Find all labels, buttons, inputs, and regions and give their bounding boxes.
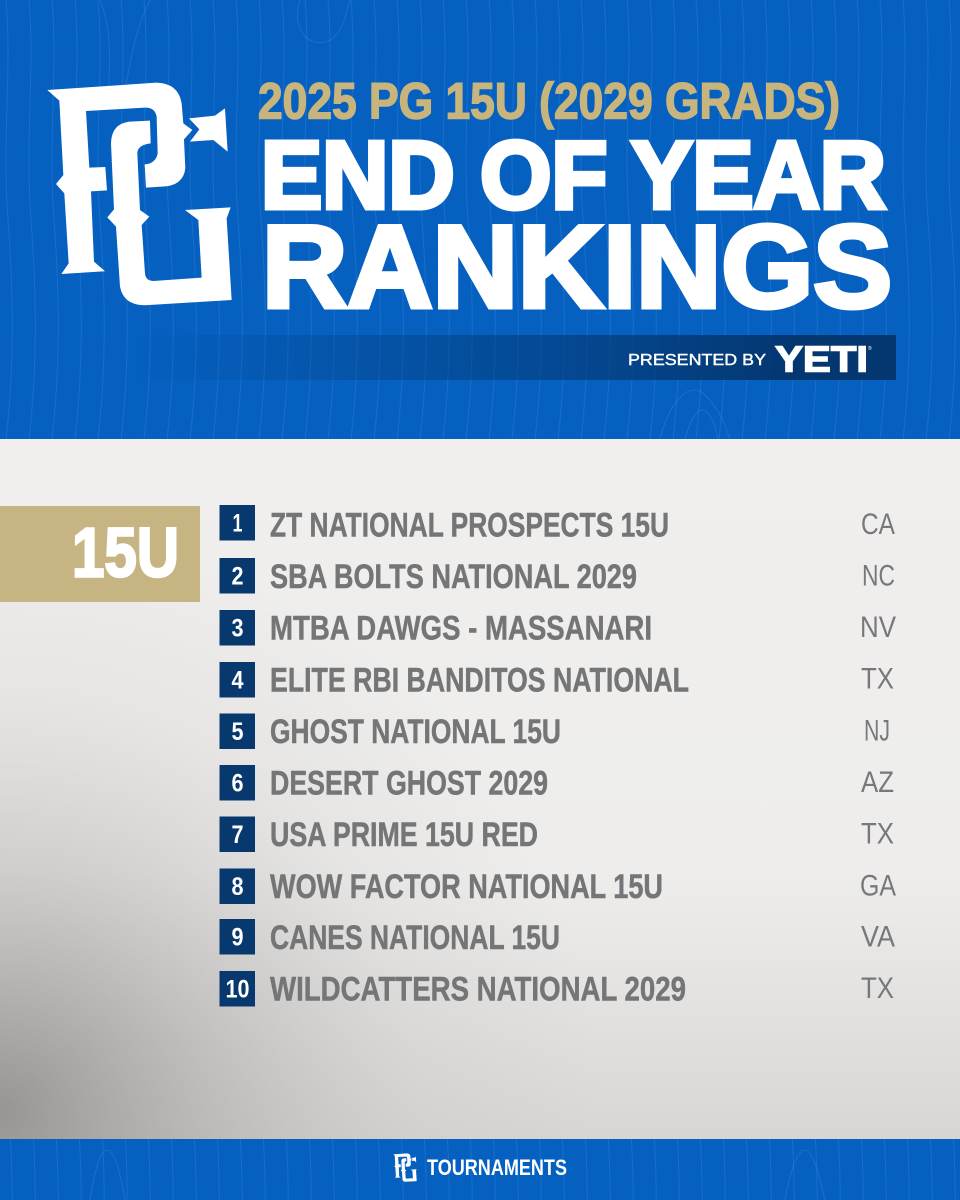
rank 1: ZT NATIONAL PROSPECTS 15U [270,506,669,544]
title: end of year: END OF YEAR [261,122,886,229]
rank 6: DESERT GHOST 2029 [270,764,548,802]
rank 3: MTBA DAWGS - MASSANARI [270,609,652,647]
rank 6: 6 [232,769,244,797]
rank 8: WOW FACTOR NATIONAL 15U [270,868,663,906]
rank 9: 9 [232,923,244,951]
footer bar [0,1139,960,1200]
rank 1: 1 [232,509,243,537]
header background [0,0,960,439]
rank 9 [220,919,895,957]
title: rankings: RANKINGS [262,201,892,332]
rank 10: TX [861,972,894,1005]
PG logo [47,83,232,305]
rank 3: NV [860,611,896,644]
rank 7: USA PRIME 15U RED [270,816,538,854]
rank 2: SBA BOLTS NATIONAL 2029 [270,558,637,596]
sponsor banner [130,335,896,380]
age group tab [0,506,200,602]
rankings panel background [0,439,960,1139]
rank 2: 2 [232,562,244,590]
sponsor banner: PRESENTED BY [628,352,766,369]
rank 5: 5 [232,718,244,746]
rank 10: WILDCATTERS NATIONAL 2029 [270,970,686,1008]
rank 6: AZ [861,766,894,799]
rank 2: NC [862,559,895,592]
title: season line: 2025 PG 15U (2029 GRADS) [258,72,840,130]
rankings list [220,505,896,1008]
rank 4: 4 [232,666,244,694]
rank 1: CA [861,508,895,541]
rank 6 [220,764,894,802]
rank 8: 8 [232,873,244,901]
rank 4: TX [861,662,894,695]
rank 7: 7 [232,821,244,849]
footer PG logo [393,1153,417,1182]
rank 7: TX [861,817,894,850]
rank 9: VA [861,920,895,953]
age group tab: 15U [72,514,179,592]
rank 5: NJ [864,714,890,747]
rank 9: CANES NATIONAL 15U [270,919,560,957]
rank 4: ELITE RBI BANDITOS NATIONAL [270,661,689,699]
rank 5 [220,713,890,751]
rank 5: GHOST NATIONAL 15U [270,713,561,751]
sponsor banner: YETI [775,338,868,380]
rank 2 [220,558,895,596]
rank 7 [220,816,894,854]
rank 10: 10 [226,975,250,1003]
rank 3: 3 [232,614,244,642]
footer label: TOURNAMENTS [427,1155,567,1180]
rank 8: GA [860,869,896,902]
sponsor banner: ® [868,345,872,352]
